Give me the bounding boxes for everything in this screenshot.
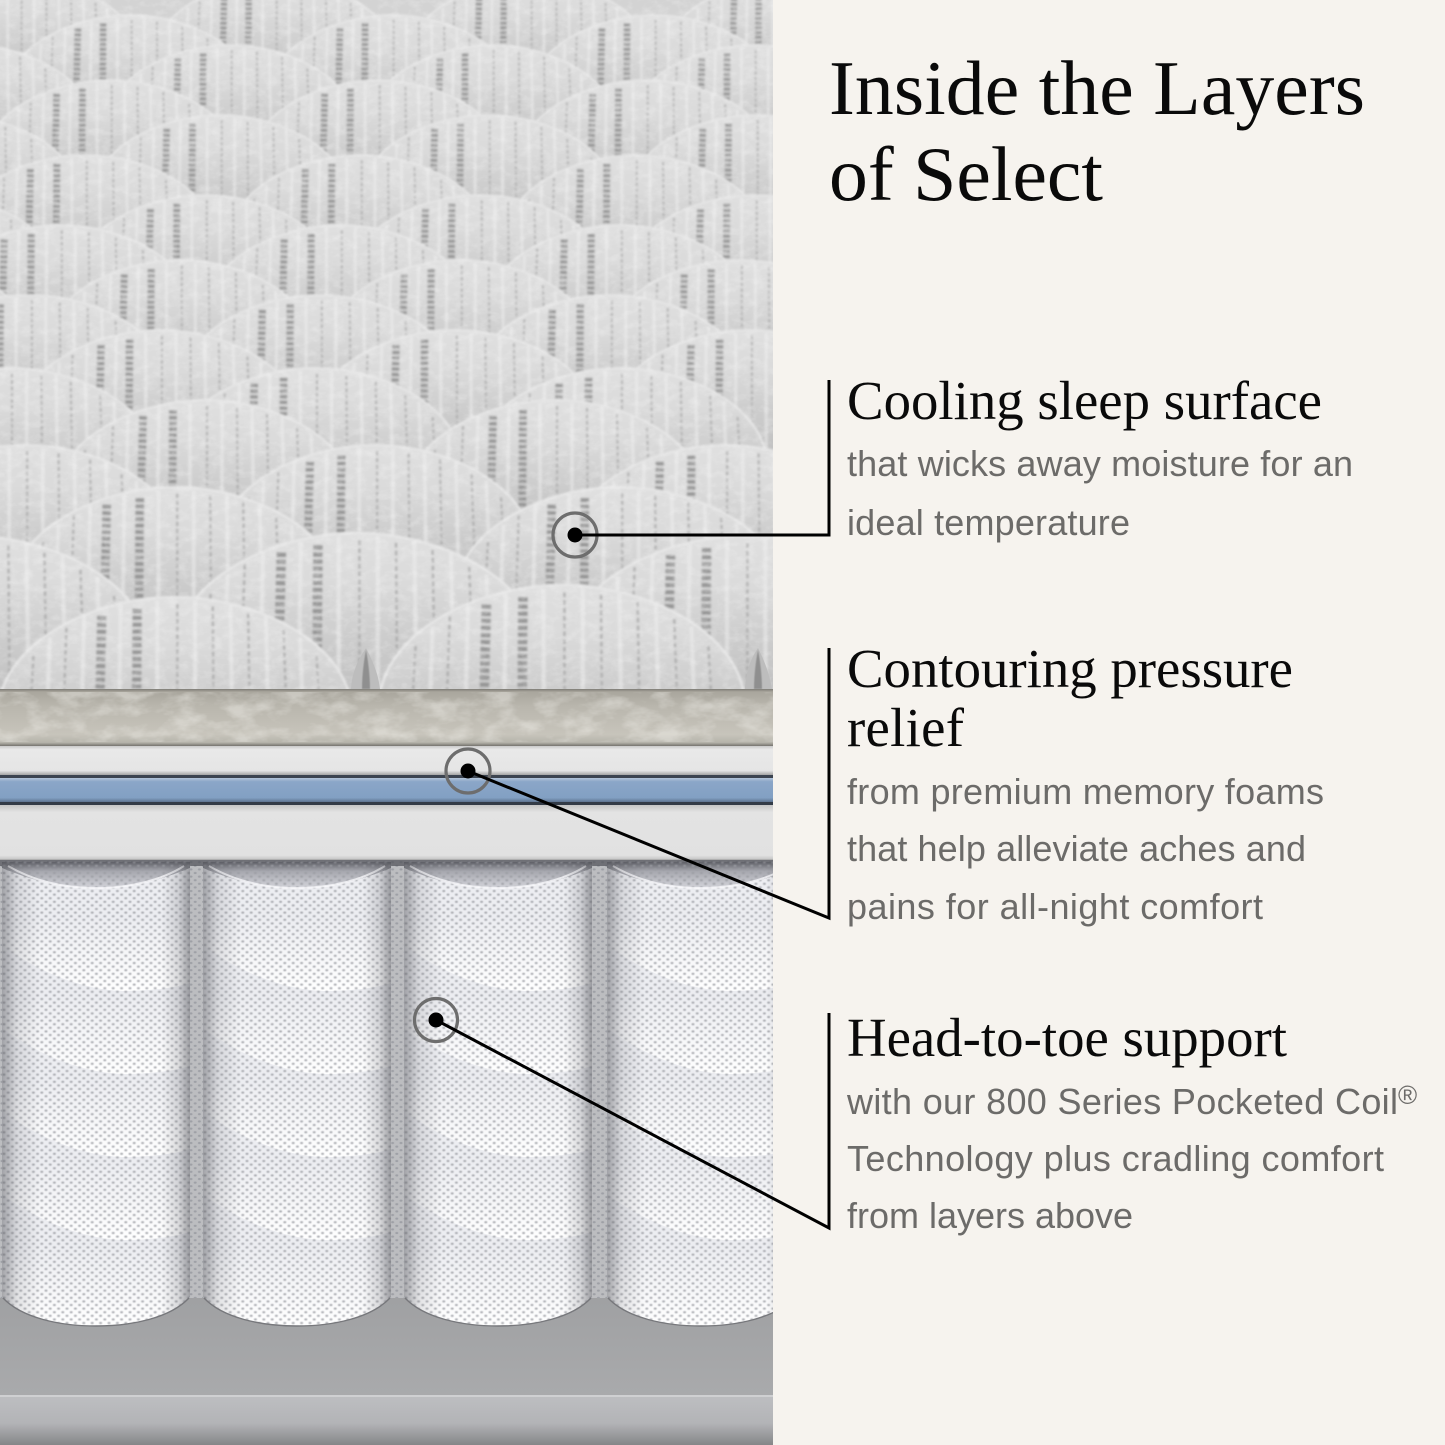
connector line 3 xyxy=(436,1013,829,1228)
callout 3: head-to-toe support xyxy=(414,998,1417,1236)
coil 1 xyxy=(2,862,190,1326)
heading: contouring pressure relief: Contouring pressure xyxy=(847,638,1293,699)
fiber comfort layer xyxy=(0,689,773,746)
title: of Select xyxy=(829,131,1103,217)
text: contouring description xyxy=(847,771,1324,927)
dark seam xyxy=(0,775,773,778)
heading: contouring pressure relief: relief xyxy=(847,697,965,758)
quilted cooling top surface xyxy=(0,0,773,689)
marker: foam point xyxy=(446,749,490,793)
text: support description: from layers above xyxy=(847,1195,1133,1236)
white memory foam layer xyxy=(0,746,773,775)
callout 1: cooling sleep surface xyxy=(553,370,1353,557)
pocketed coils row xyxy=(0,860,795,1326)
marker: coil point xyxy=(414,998,458,1042)
marker: surface point xyxy=(553,513,597,557)
mattress cross-section image xyxy=(0,0,773,1445)
text: support description: ® xyxy=(1398,1080,1417,1110)
white support foam layer xyxy=(0,805,773,861)
connector line 2 xyxy=(468,648,829,918)
dark seam xyxy=(0,802,773,805)
text: support description: with our 800 Series Pocketed Coil xyxy=(846,1081,1398,1122)
text: cooling description xyxy=(847,443,1353,543)
text: support description: Technology plus cradling comfort xyxy=(847,1138,1384,1179)
text: contouring description: pains for all-night comfort xyxy=(847,886,1263,927)
text: support description xyxy=(846,1080,1417,1236)
blue gel foam layer xyxy=(0,778,773,802)
title: Inside the Layers xyxy=(829,45,1365,131)
grey base front edge xyxy=(0,1395,773,1445)
text: cooling description: that wicks away moisture for an xyxy=(847,443,1353,484)
title xyxy=(829,45,1365,217)
heading: head-to-toe support: Head-to-toe support xyxy=(847,1007,1287,1068)
callout 2: contouring pressure relief xyxy=(446,638,1324,927)
connector line 1 xyxy=(575,380,829,535)
coil 4 xyxy=(607,862,773,1327)
coil 3 xyxy=(404,862,592,1326)
heading: contouring pressure relief xyxy=(847,638,1293,758)
coil 2 xyxy=(203,862,391,1326)
grey base top surface xyxy=(0,1270,773,1396)
text: contouring description: from premium memory foams xyxy=(847,771,1324,812)
text: contouring description: that help alleviate aches and xyxy=(847,828,1306,869)
heading: cooling sleep surface: Cooling sleep surface xyxy=(847,370,1322,431)
text: cooling description: ideal temperature xyxy=(847,502,1130,543)
